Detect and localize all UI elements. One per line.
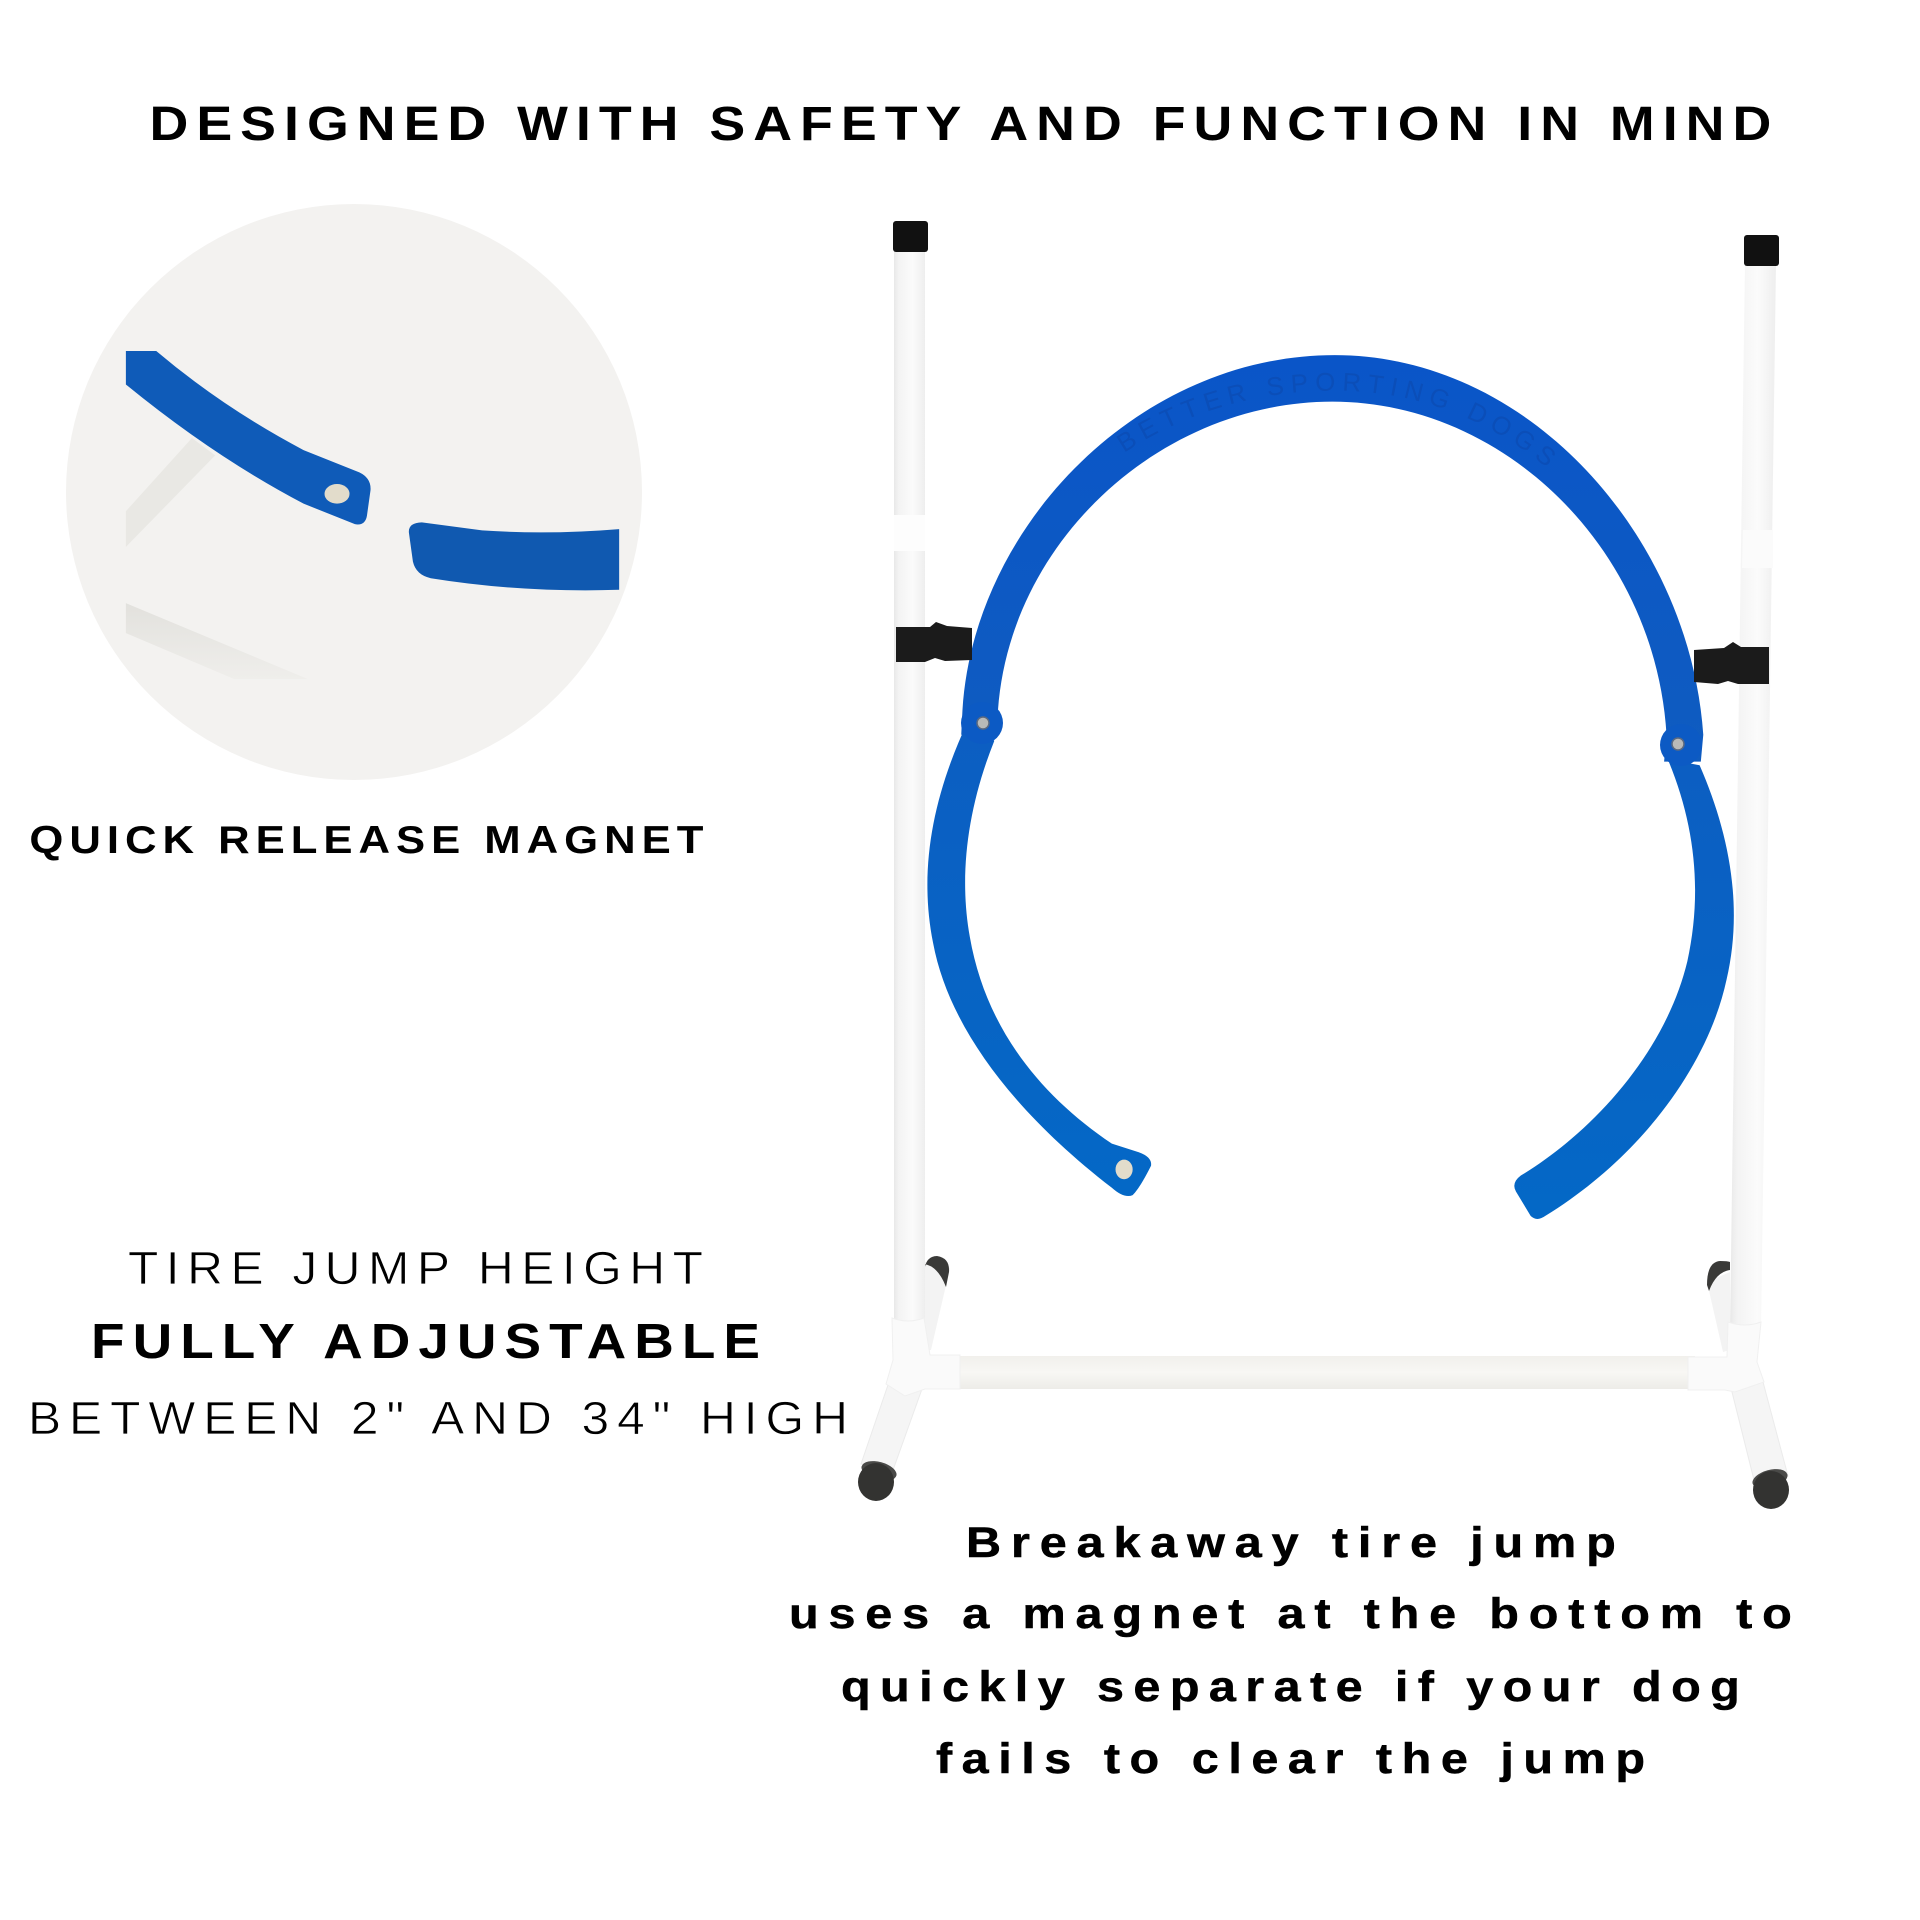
left hinge (961, 702, 1003, 744)
height text block: FULLY ADJUSTABLE (91, 1315, 760, 1369)
upper arch (961, 355, 1703, 762)
description text block: fails to clear the jump (936, 1734, 1645, 1782)
right hinge (1660, 724, 1702, 766)
right clamp (1694, 642, 1769, 684)
left post (893, 221, 928, 1322)
description text block: uses a magnet at the bottom to (789, 1589, 1792, 1637)
right post (1730, 235, 1779, 1330)
embossed brand text: BETTER SPORTING DOGS (1116, 373, 1554, 465)
description text block: Breakaway tire jump (966, 1518, 1616, 1566)
height text block (28, 1244, 848, 1445)
rear feet (914, 1256, 1730, 1352)
left clamp (896, 622, 972, 662)
front right leg and foot (1731, 1382, 1790, 1509)
front left leg and foot (858, 1382, 922, 1501)
height text block: TIRE JUMP HEIGHT (128, 1244, 703, 1295)
right blue ring end (409, 522, 619, 590)
left fitting (886, 1318, 960, 1396)
title: DESIGNED WITH SAFETY AND FUNCTION IN MIND (150, 97, 1771, 150)
magnet disc (325, 484, 350, 504)
magnet caption: QUICK RELEASE MAGNET (29, 818, 703, 861)
lower left hoop segment (927, 722, 1151, 1196)
description text block (789, 1518, 1792, 1782)
blue hoop (927, 355, 1734, 1219)
description text block: quickly separate if your dog (841, 1662, 1740, 1710)
lower white tube (126, 603, 308, 679)
magnet (1116, 1160, 1133, 1179)
lower right hoop segment (1514, 759, 1734, 1219)
height text block: BETWEEN 2" AND 34" HIGH (28, 1394, 848, 1445)
diagonal white tube (126, 438, 215, 547)
right fitting (1688, 1322, 1764, 1392)
panel: quick release magnet close-up (66, 204, 642, 780)
cross bar (955, 1356, 1695, 1389)
left blue ring end (126, 351, 371, 524)
tire jump frame (858, 221, 1790, 1509)
